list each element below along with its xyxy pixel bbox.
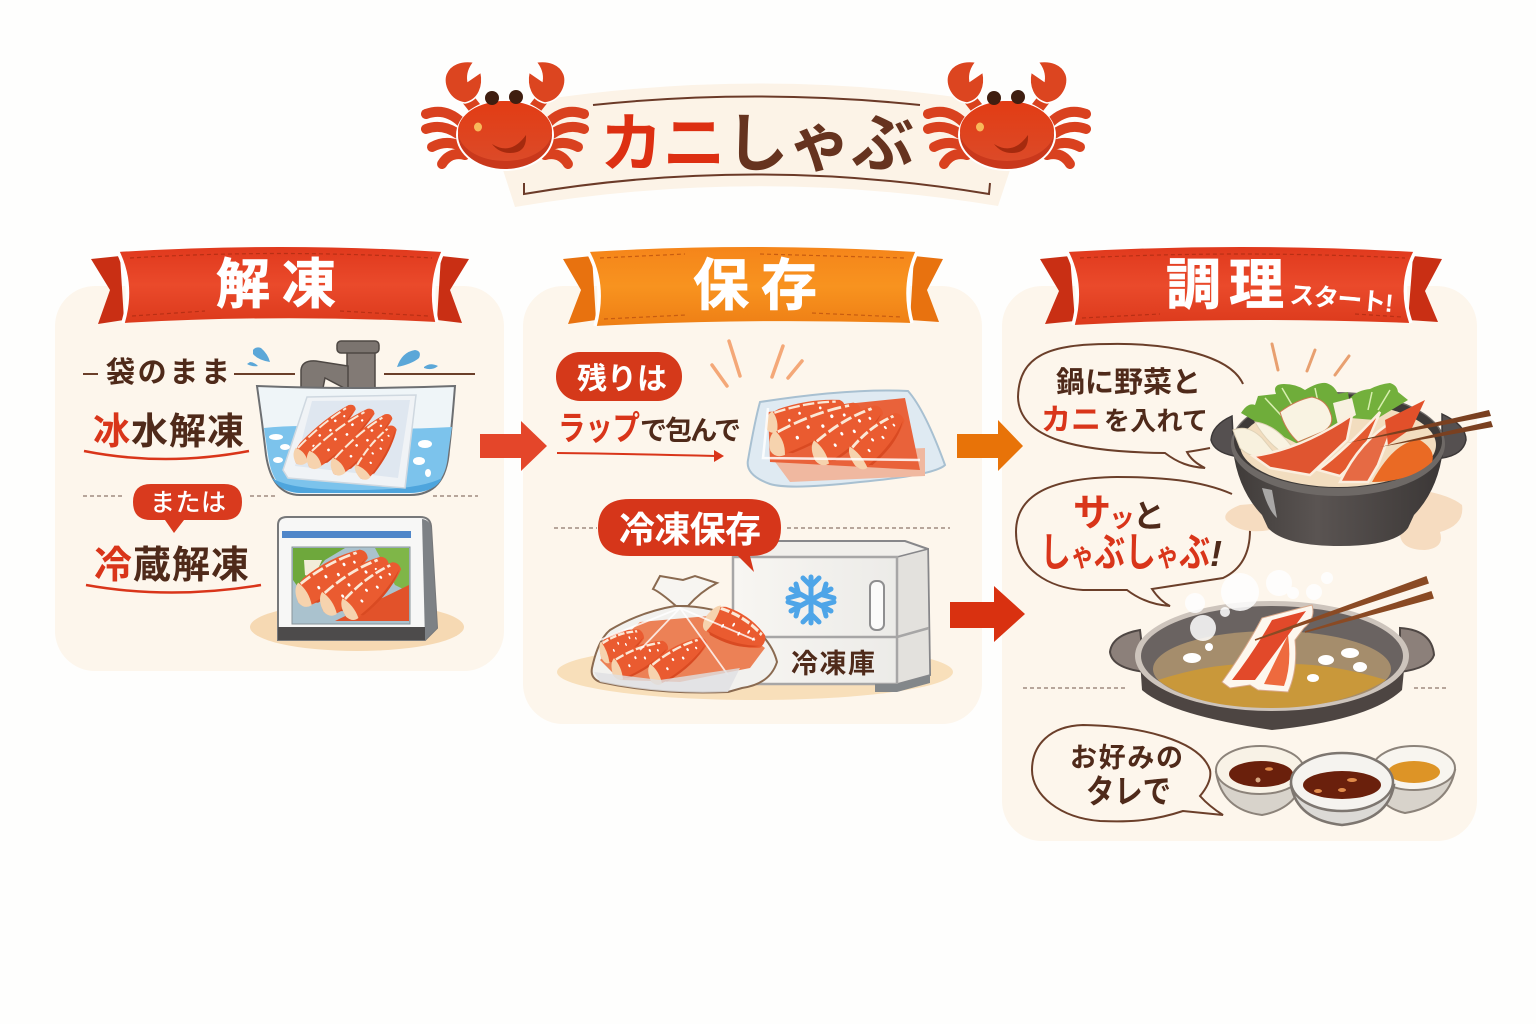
callout: freezer storage (598, 499, 781, 572)
speech bubble: swish: と (1133, 498, 1165, 534)
label: as packaged: 袋のまま (106, 356, 230, 389)
steam (1185, 570, 1333, 641)
heading ribbon: thawing: 解凍 (216, 255, 336, 315)
icon: shabu pan with crab (1110, 570, 1434, 730)
panel: thawing (55, 247, 504, 671)
icon: fridge plate (250, 603, 464, 651)
chopsticks (1347, 410, 1493, 447)
speech bubble: swish: ! (1210, 533, 1222, 574)
vegetables (1233, 383, 1408, 458)
chopsticks (1255, 577, 1433, 640)
divider (554, 527, 950, 529)
label: wrap: で包んで (640, 416, 741, 446)
label: wrap (557, 410, 741, 462)
icon: freezer bag of crab legs (592, 576, 777, 693)
dish: right (1372, 746, 1455, 813)
speech bubble: add vegetables and crab (1018, 344, 1243, 468)
icon: wrapped crab legs (748, 390, 945, 487)
title banner (426, 62, 1086, 207)
title ribbon background (503, 83, 1010, 207)
icon: plate under freezer (557, 644, 953, 700)
icon: burst lines (1272, 344, 1349, 375)
icon: sauce dishes (1216, 746, 1455, 825)
heading ribbon: thawing (91, 247, 469, 324)
speech bubble: add vegetables and crab: カニ (1041, 404, 1101, 437)
icon: right crab (928, 62, 1086, 171)
speech bubble: swish: しゃぶしゃぶ (1040, 531, 1210, 575)
heading ribbon: cooking: 調理 (1166, 254, 1284, 316)
label: fridge thawing: 冷蔵解凍 (94, 545, 249, 587)
dish: left (1216, 746, 1305, 815)
icon: faucet and water bowl (247, 341, 455, 495)
callout: or: または (150, 489, 226, 517)
title text: カニしゃぶ (600, 108, 914, 180)
icon: fridge box with crab legs (278, 517, 437, 640)
icon: snowflake (788, 577, 834, 623)
arrow: storage to cooking bottom (950, 586, 1025, 642)
icon: left crab (426, 62, 584, 171)
dish: center (1291, 753, 1394, 825)
icon: hot pot with crab and vegetables (1211, 383, 1493, 550)
arrow: storage to cooking top (957, 420, 1023, 471)
crab legs (1253, 400, 1425, 482)
arrow: thawing to storage (480, 421, 547, 471)
panel background (55, 286, 504, 671)
speech bubble: swish (1016, 477, 1250, 606)
speech bubble: with sauce: お好みの (1070, 743, 1183, 773)
heading ribbon: storage: 保存 (693, 254, 817, 317)
icon: freezer (733, 541, 930, 692)
callout: or (133, 484, 242, 533)
speech bubble: with sauce: タレで (1086, 773, 1171, 810)
panel: cooking (1002, 247, 1493, 841)
callout: leftovers (556, 352, 682, 401)
label: ice water thawing: 冰水解凍 (93, 411, 244, 452)
speech bubble: swish: ッ (1109, 503, 1135, 533)
heading ribbon: cooking: スタート! (1288, 281, 1395, 318)
callout: freezer storage: 冷凍保存 (619, 509, 761, 550)
freezer label: 冷凍庫 (791, 649, 875, 679)
panel: storage (523, 247, 982, 724)
divider (83, 495, 478, 497)
crab meat (1222, 605, 1313, 692)
panel background (523, 286, 982, 724)
speech bubble: with sauce (1032, 725, 1223, 821)
panel background (1002, 286, 1477, 841)
speech bubble: add vegetables and crab: 鍋に野菜と (1056, 366, 1201, 399)
icon: burst lines (712, 341, 802, 386)
label: wrap: ラップ (558, 410, 640, 448)
divider (1023, 687, 1447, 689)
ribbon top line (593, 96, 920, 105)
heading ribbon: cooking (1040, 247, 1442, 325)
speech bubble: add vegetables and crab: を入れて (1104, 406, 1208, 436)
callout: leftovers: 残りは (577, 363, 667, 396)
speech bubble: swish: サ (1073, 493, 1111, 535)
ribbon bottom line (524, 174, 990, 194)
heading ribbon: storage (563, 247, 943, 326)
